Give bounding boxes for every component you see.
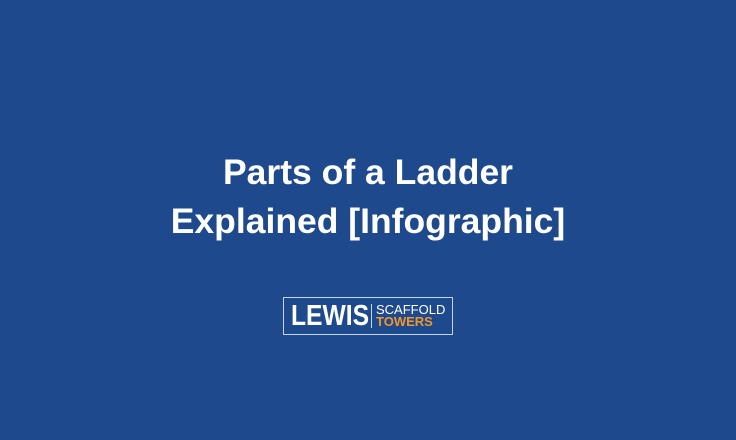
logo: scaffold towers: [376, 302, 445, 329]
logo: scaffold towers: TOWERS: [376, 314, 433, 329]
logo: LEWIS: LEWIS: [291, 300, 369, 332]
logo divider: [371, 304, 372, 328]
title: [171, 152, 565, 241]
title: Explained [Infographic]: [171, 201, 565, 241]
logo: [283, 297, 453, 335]
logo: scaffold towers: SCAFFOLD: [376, 302, 445, 317]
title: Parts of a Ladder: [223, 152, 513, 192]
